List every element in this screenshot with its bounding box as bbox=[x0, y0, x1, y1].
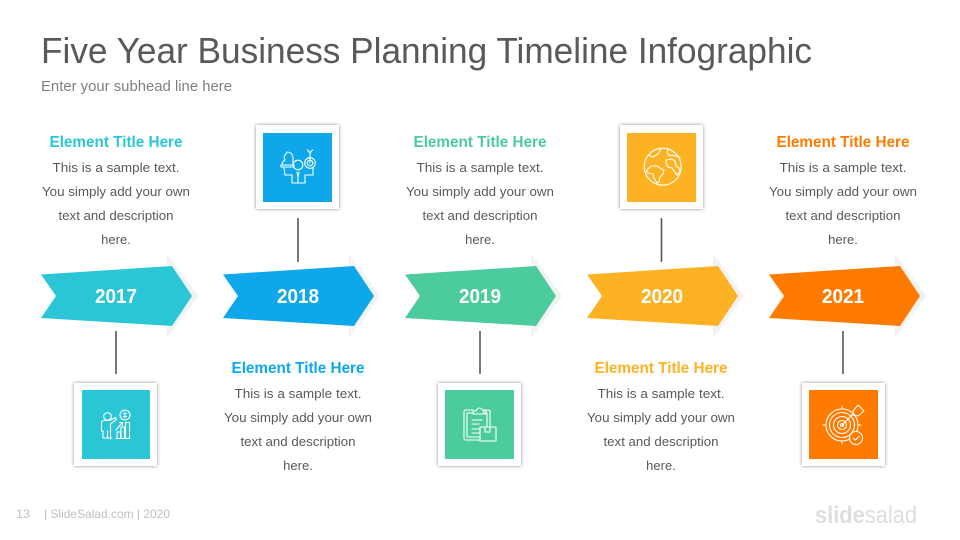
text block: 2020 element: here. bbox=[646, 458, 676, 473]
connector: 2018 bbox=[297, 218, 299, 262]
text block: 2019 element: This is a sample text. bbox=[416, 160, 544, 175]
text block: 2018 element: text and description bbox=[240, 434, 356, 449]
text block: 2018 element bbox=[224, 360, 372, 473]
text block: 2019 element: here. bbox=[465, 232, 495, 247]
footer: page info: 13 bbox=[16, 507, 30, 521]
text block: 2017 element: here. bbox=[101, 232, 131, 247]
arrow: 2020 bbox=[587, 254, 744, 338]
column: 2018 bbox=[223, 125, 380, 473]
text block: 2020 element: Element Title Here bbox=[594, 360, 728, 377]
text block: 2021 element: Element Title Here bbox=[776, 134, 910, 151]
connector: 2021 bbox=[842, 331, 844, 374]
arrow: 2017: 2017 bbox=[95, 286, 137, 308]
text block: 2021 element: This is a sample text. bbox=[780, 160, 906, 175]
column: 2020 bbox=[587, 125, 744, 473]
text block: 2020 element bbox=[587, 360, 735, 473]
icon card: clipboard with box bbox=[438, 383, 521, 466]
text block: 2018 element: here. bbox=[283, 458, 313, 473]
text block: 2020 element: This is a sample text. bbox=[598, 386, 724, 401]
text block: 2017 element bbox=[42, 134, 190, 247]
text block: 2017 element: You simply add your own bbox=[42, 184, 190, 199]
text block: 2020 element: text and description bbox=[604, 434, 718, 449]
arrow: 2017 bbox=[41, 254, 198, 338]
column: 2019 bbox=[405, 134, 562, 466]
column: 2021 bbox=[769, 134, 926, 466]
logo: slidesalad: slidesalad bbox=[815, 502, 917, 529]
icon card: presenter with growth chart bbox=[74, 383, 157, 466]
text block: 2021 element: here. bbox=[828, 232, 858, 247]
arrow: 2020: 2020 bbox=[641, 286, 683, 308]
arrow: 2018: 2018 bbox=[277, 286, 319, 308]
text block: 2021 element: text and description bbox=[786, 208, 900, 223]
text block: 2018 element: You simply add your own bbox=[224, 410, 372, 425]
text block: 2019 element: You simply add your own bbox=[406, 184, 554, 199]
text block: 2018 element: This is a sample text. bbox=[234, 386, 362, 401]
icon card: target with dart bbox=[802, 383, 885, 466]
connector: 2020 bbox=[660, 218, 662, 262]
text block: 2019 element: text and description bbox=[422, 208, 538, 223]
arrow: 2019 bbox=[405, 254, 562, 338]
text block: 2020 element: You simply add your own bbox=[587, 410, 735, 425]
text block: 2017 element: This is a sample text. bbox=[52, 160, 180, 175]
footer: page info: | SlideSalad.com | 2020 bbox=[44, 507, 170, 521]
icon card: strategy chess and target bbox=[256, 125, 339, 209]
text block: 2021 element: You simply add your own bbox=[769, 184, 917, 199]
column: 2017 bbox=[41, 134, 198, 466]
connector: 2019 bbox=[479, 331, 481, 374]
icon card: globe bbox=[620, 125, 703, 209]
title: Five Year Business Planning Timeline Infographic bbox=[41, 30, 812, 71]
text block: 2019 element bbox=[406, 134, 554, 247]
text block: 2017 element: Element Title Here bbox=[50, 134, 183, 151]
text block: 2018 element: Element Title Here bbox=[232, 360, 365, 377]
arrow: 2021 bbox=[769, 254, 926, 338]
arrow: 2021: 2021 bbox=[822, 286, 864, 308]
connector: 2017 bbox=[115, 331, 117, 374]
arrow: 2019: 2019 bbox=[459, 286, 501, 308]
text block: 2019 element: Element Title Here bbox=[414, 134, 547, 151]
subhead: Enter your subhead line here bbox=[41, 79, 232, 95]
arrow: 2018 bbox=[223, 254, 380, 338]
text block: 2017 element: text and description bbox=[58, 208, 174, 223]
text block: 2021 element bbox=[769, 134, 917, 247]
